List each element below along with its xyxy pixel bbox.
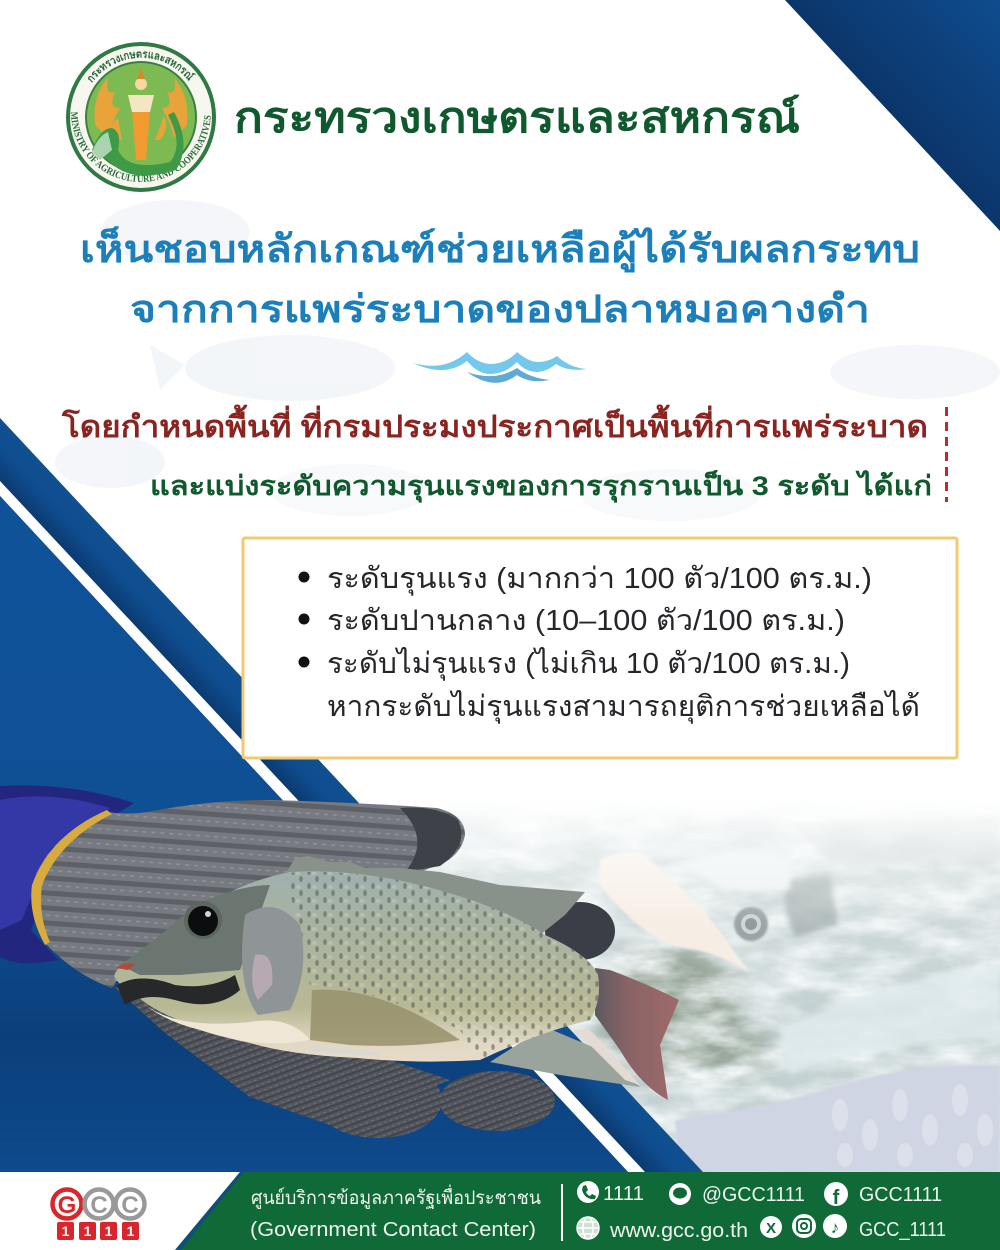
photo: water and fish background (340, 770, 1000, 1173)
footer agency name: (Government Contact Center) (250, 1219, 536, 1241)
title (80, 226, 920, 331)
panel: severity levels: ระดับปานกลาง (10–100 ตัว/100 ตร.ม.) (327, 605, 845, 637)
subheading: outbreak area: โดยกำหนดพื้นที่ ที่กรมประมงประกาศเป็นพื้นที่การแพร่ระบาด (61, 404, 928, 444)
dashed vertical divider (945, 407, 948, 502)
icon: water waves (413, 352, 587, 383)
title: เห็นชอบหลักเกณฑ์ช่วยเหลือผู้ได้รับผลกระทบ (80, 226, 920, 273)
corner triangle top right (785, 0, 1000, 231)
footer contact channels (577, 1181, 946, 1242)
footer white logo area (0, 1172, 240, 1250)
sleeve (0, 785, 134, 963)
logo: Ministry of Agriculture and Cooperatives: MINISTRY OF AGRICULTURE AND COOPERATIVES (70, 112, 211, 182)
faint background fish silhouettes (55, 200, 1000, 521)
main blue panel (0, 496, 628, 1172)
logo: Ministry of Agriculture and Cooperatives: กระทรวงเกษตรและสหกรณ์ (88, 51, 196, 83)
anal fin (490, 1027, 640, 1087)
footer contact channels: GCC1111 (859, 1184, 942, 1206)
footer contact channels: X (766, 1220, 776, 1237)
GCC logo: 1 (127, 1223, 135, 1239)
GCC logo: 1 (105, 1223, 113, 1239)
GCC logo: 1 (62, 1223, 70, 1239)
fish body (114, 871, 599, 1062)
footer contact channels: @GCC1111 (702, 1184, 805, 1206)
footer bar (0, 1172, 1000, 1250)
pale pectoral fin in water (600, 852, 750, 973)
glove back and thumb (33, 800, 465, 988)
caudal fin (595, 968, 679, 1100)
GCC logo: 1 (84, 1223, 92, 1239)
footer contact channels: GCC_1111 (859, 1219, 946, 1241)
GCC logo: G (58, 1192, 76, 1219)
GCC logo: C (121, 1192, 139, 1219)
photo: gloved hand holding fish (0, 785, 679, 1138)
finger behind tail (545, 902, 615, 960)
panel: severity levels (243, 538, 957, 758)
dorsal fin (285, 856, 585, 935)
fish eye (184, 901, 222, 939)
footer contact channels: f (833, 1187, 840, 1209)
diagonal blue band (0, 418, 703, 1172)
white diagonal stripe (0, 481, 645, 1172)
panel: severity levels: ระดับไม่รุนแรง (ไม่เกิน 10 ตัว/100 ตร.ม.) (327, 646, 850, 681)
GCC logo: C (90, 1192, 108, 1219)
title: จากการแพร่ระบาดของปลาหมอคางดำ (130, 289, 870, 331)
footer contact channels: 1111 (603, 1183, 644, 1205)
footer contact channels: ♪ (831, 1218, 839, 1237)
footer agency name (250, 1184, 541, 1241)
GCC logo (52, 1190, 144, 1240)
subheading: severity levels: และแบ่งระดับความรุนแรงของการรุกรานเป็น 3 ระดับ ได้แก่ (150, 468, 932, 503)
footer agency name: ศูนย์บริการข้อมูลภาครัฐเพื่อประชาชน (251, 1184, 541, 1209)
footer contact channels: www.gcc.go.th (609, 1220, 748, 1242)
pectoral fin (310, 990, 460, 1046)
heading: ministry name: กระทรวงเกษตรและสหกรณ์ (234, 94, 800, 141)
logo: Ministry of Agriculture and Cooperatives (66, 42, 216, 192)
lower fingers (439, 1071, 555, 1131)
lower palm (112, 985, 450, 1125)
head dark band (117, 975, 240, 1005)
panel: severity levels: ระดับรุนแรง (มากกว่า 100 ตัว/100 ตร.ม.) (327, 563, 872, 596)
lower big scaled fish (675, 1065, 1000, 1172)
wrist band (31, 810, 112, 945)
panel: severity levels: หากระดับไม่รุนแรงสามารถยุติการช่วยเหลือได้ (327, 689, 920, 724)
